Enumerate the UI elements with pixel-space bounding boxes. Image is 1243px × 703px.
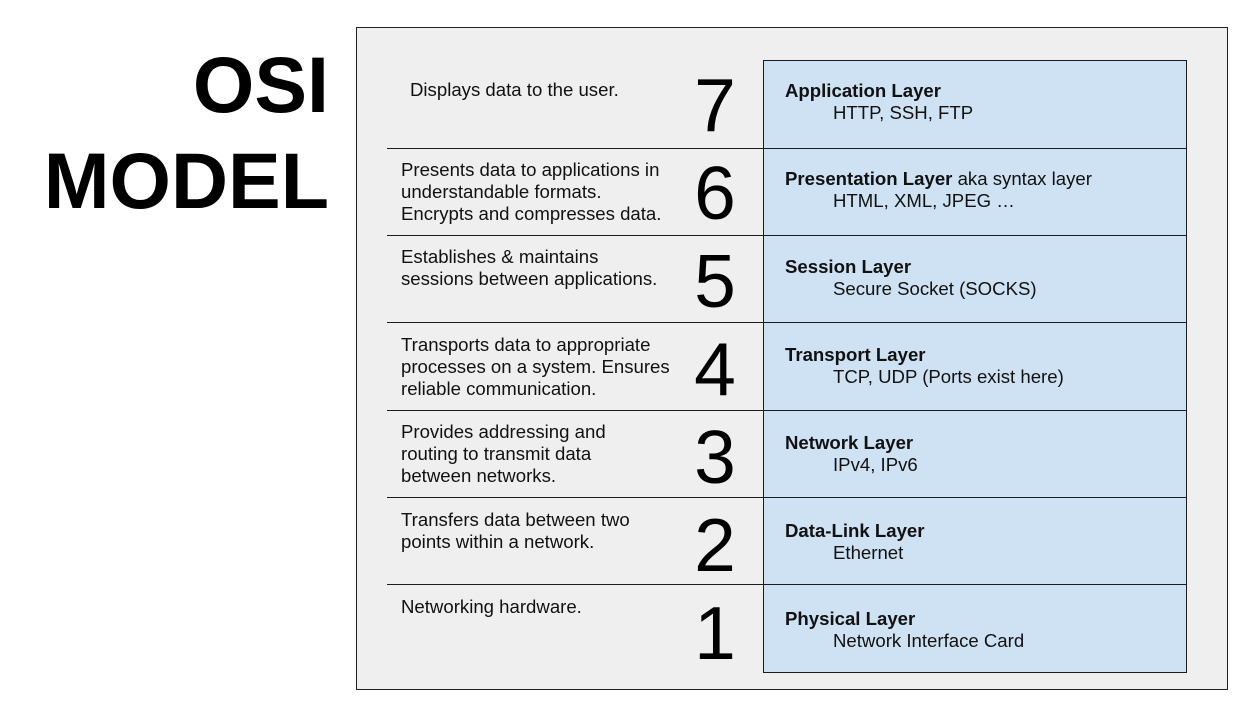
description: layer 4: Transports data to appropriate <box>401 334 650 355</box>
description: layer 7: Displays data to the user. <box>410 79 619 100</box>
label: session layer: Secure Socket (SOCKS) <box>833 278 1037 299</box>
label: application layer: Application Layer <box>785 80 941 101</box>
label: application layer: HTTP, SSH, FTP <box>833 102 973 123</box>
row divider 6/5 <box>387 235 1186 236</box>
description: layer 4: reliable communication. <box>401 378 596 399</box>
description: layer 1: Networking hardware. <box>401 596 582 617</box>
description: layer 3: between networks. <box>401 465 556 486</box>
label: network layer: IPv4, IPv6 <box>833 454 918 475</box>
label: network layer: Network Layer <box>785 432 913 453</box>
description: layer 3: Provides addressing and <box>401 421 606 442</box>
row divider 4/3 <box>387 410 1186 411</box>
description: layer 3: routing to transmit data <box>401 443 591 464</box>
label: data-link layer: Data-Link Layer <box>785 520 924 541</box>
label: data-link layer: Ethernet <box>833 542 903 563</box>
number 6: 6 <box>694 151 736 235</box>
number 2: 2 <box>694 503 736 587</box>
description: layer 2 <box>401 509 630 552</box>
description: layer 3 <box>401 421 606 486</box>
label: session layer <box>785 256 1037 299</box>
description: layer 6: understandable formats. <box>401 181 602 202</box>
label: session layer: Session Layer <box>785 256 911 277</box>
number 7: 7 <box>694 63 736 147</box>
label: physical layer <box>785 608 1024 651</box>
description: layer 2: Transfers data between two <box>401 509 630 530</box>
title: MODEL <box>44 136 329 225</box>
label: transport layer: TCP, UDP (Ports exist here) <box>833 366 1064 387</box>
label: presentation layer <box>785 168 1092 211</box>
description: layer 5: Establishes & maintains <box>401 246 598 267</box>
label: presentation layer: Presentation Layer aka syntax layer <box>785 168 1092 189</box>
panel: OSI layers <box>356 27 1228 690</box>
title <box>44 40 329 225</box>
description: layer 6: Encrypts and compresses data. <box>401 203 661 224</box>
number 3: 3 <box>694 415 736 499</box>
number 1: 1 <box>694 591 736 675</box>
description: layer 4 <box>401 334 670 399</box>
row divider 5/4 <box>387 322 1186 323</box>
number 5: 5 <box>694 239 736 323</box>
label: transport layer <box>785 344 1064 387</box>
label: data-link layer <box>785 520 924 563</box>
description: layer 5: sessions between applications. <box>401 268 657 289</box>
description: layer 6: Presents data to applications in <box>401 159 659 180</box>
label: network layer <box>785 432 918 475</box>
panel: layer names column <box>763 60 1187 673</box>
number 4: 4 <box>694 327 736 411</box>
row divider 7/6 <box>387 148 1186 149</box>
label: application layer <box>785 80 973 123</box>
label: physical layer: Physical Layer <box>785 608 915 629</box>
description: layer 4: processes on a system. Ensures <box>401 356 670 377</box>
description: layer 2: points within a network. <box>401 531 594 552</box>
description: layer 6 <box>401 159 661 224</box>
description: layer 5 <box>401 246 657 289</box>
label: presentation layer: HTML, XML, JPEG … <box>833 190 1015 211</box>
label: transport layer: Transport Layer <box>785 344 926 365</box>
label: physical layer: Network Interface Card <box>833 630 1024 651</box>
row divider 3/2 <box>387 497 1186 498</box>
title: OSI <box>193 40 329 129</box>
row divider 2/1 <box>387 584 1186 585</box>
